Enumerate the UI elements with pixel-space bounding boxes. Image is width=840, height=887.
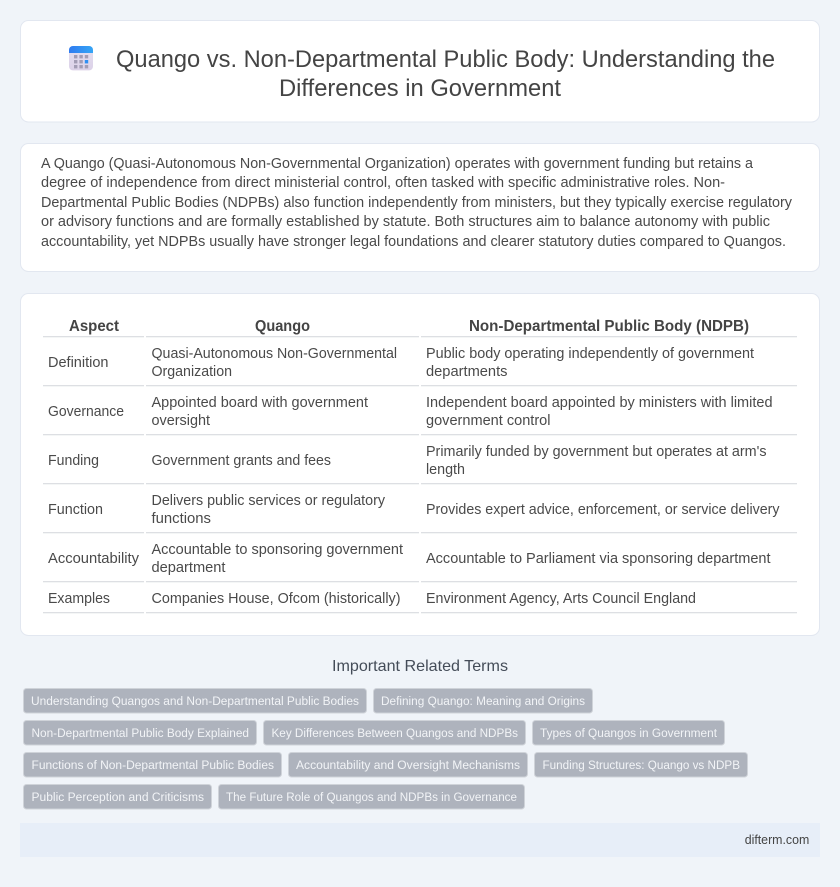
table row: governance: Independent board appointed by ministers with limited	[426, 395, 772, 411]
tag	[24, 752, 282, 777]
table row: funding: Primarily funded by government but operates at arm's	[426, 444, 766, 460]
tag	[24, 784, 212, 809]
table row: function: functions	[152, 511, 211, 527]
tag: Funding Structures: Quango vs NDPB	[542, 758, 740, 772]
table row: governance: oversight	[152, 413, 210, 429]
tag: Defining Quango: Meaning and Origins	[381, 694, 585, 708]
table row: accountability: Accountable to sponsoring government	[152, 542, 403, 558]
tag: Accountability and Oversight Mechanisms	[296, 758, 520, 772]
table row: governance: Governance	[48, 404, 124, 420]
table row: definition: Organization	[152, 364, 232, 380]
text block: introduction paragraph	[41, 156, 793, 250]
tag: Key Differences Between Quangos and NDPBs	[272, 726, 518, 740]
table row: examples: Environment Agency, Arts Council England	[426, 591, 696, 607]
table row: examples	[48, 591, 696, 607]
title: Quango vs. Non-Departmental Public Body: Understanding the	[116, 46, 775, 73]
tag: Public Perception and Criticisms	[32, 790, 204, 804]
table row: accountability	[48, 542, 770, 576]
table row: funding: Government grants and fees	[152, 453, 331, 469]
heading: related terms: Important Related Terms	[332, 658, 508, 675]
tag	[264, 720, 526, 745]
table header row	[69, 318, 749, 335]
text block: introduction paragraph: accountability, yet NDPBs usually have stronger legal foundations and clearer statutory duties compared to Quangos.	[41, 234, 786, 250]
table row: definition: departments	[426, 364, 508, 380]
table row: function: Function	[48, 502, 103, 518]
panel: header	[20, 20, 820, 122]
tag	[534, 752, 748, 777]
table row: accountability: department	[152, 560, 226, 576]
table row: definition: Quasi-Autonomous Non-Governmental	[152, 346, 397, 362]
table row: governance: Appointed board with government	[152, 395, 368, 411]
table header row: Non-Departmental Public Body (NDPB)	[469, 318, 749, 335]
tag: The Future Role of Quangos and NDPBs in Governance	[226, 790, 517, 804]
footer	[20, 823, 820, 857]
table row: function: Delivers public services or regulatory	[152, 493, 386, 509]
tag	[24, 688, 366, 713]
tag	[218, 784, 524, 809]
table row: function: Provides expert advice, enforcement, or service delivery	[426, 502, 780, 518]
table row: governance: government control	[426, 413, 550, 429]
table header row: Aspect	[69, 318, 119, 335]
table row: definition: Public body operating independently of government	[426, 346, 754, 362]
table row: function	[48, 493, 780, 527]
panel: related term tags	[24, 688, 748, 809]
tag	[24, 720, 256, 745]
tag: Types of Quangos in Government	[540, 726, 718, 740]
icon: calendar	[69, 46, 93, 70]
table header row: Quango	[255, 318, 310, 335]
panel: introduction	[20, 144, 820, 272]
text block: introduction paragraph: degree of independence from direct ministerial control, often tasked with specific administrative roles. Non-	[41, 175, 725, 191]
table row: accountability: Accountability	[48, 551, 140, 567]
text block: introduction paragraph: or advisory functions and are formally established by statute. Both structures aim to balance autonomy with public	[41, 214, 770, 230]
table row: examples: Examples	[48, 591, 110, 607]
panel: comparison table	[20, 294, 820, 636]
table row: definition: Definition	[48, 355, 108, 371]
table row: funding: Funding	[48, 453, 99, 469]
tag	[288, 752, 528, 777]
table row: examples: Companies House, Ofcom (historically)	[152, 591, 400, 607]
tag	[374, 688, 592, 713]
tag	[532, 720, 724, 745]
table row: funding: length	[426, 462, 465, 478]
table row: definition	[48, 346, 754, 380]
table row: governance	[48, 395, 772, 429]
title	[116, 46, 775, 102]
tag: Non-Departmental Public Body Explained	[32, 726, 249, 740]
table row: accountability: Accountable to Parliament via sponsoring department	[426, 551, 770, 567]
tag: Functions of Non-Departmental Public Bodies	[32, 758, 274, 772]
text block: introduction paragraph: Departmental Public Bodies (NDPBs) also function independently from ministers, but they typically exercise regulatory	[41, 195, 793, 211]
text block: introduction paragraph: A Quango (Quasi-Autonomous Non-Governmental Organization) operates with government funding but retains a	[41, 156, 753, 172]
footer: difterm.com	[745, 832, 809, 847]
tag: Understanding Quangos and Non-Departmental Public Bodies	[31, 694, 359, 708]
table row: funding	[48, 444, 766, 478]
title: Differences in Government	[279, 75, 561, 102]
